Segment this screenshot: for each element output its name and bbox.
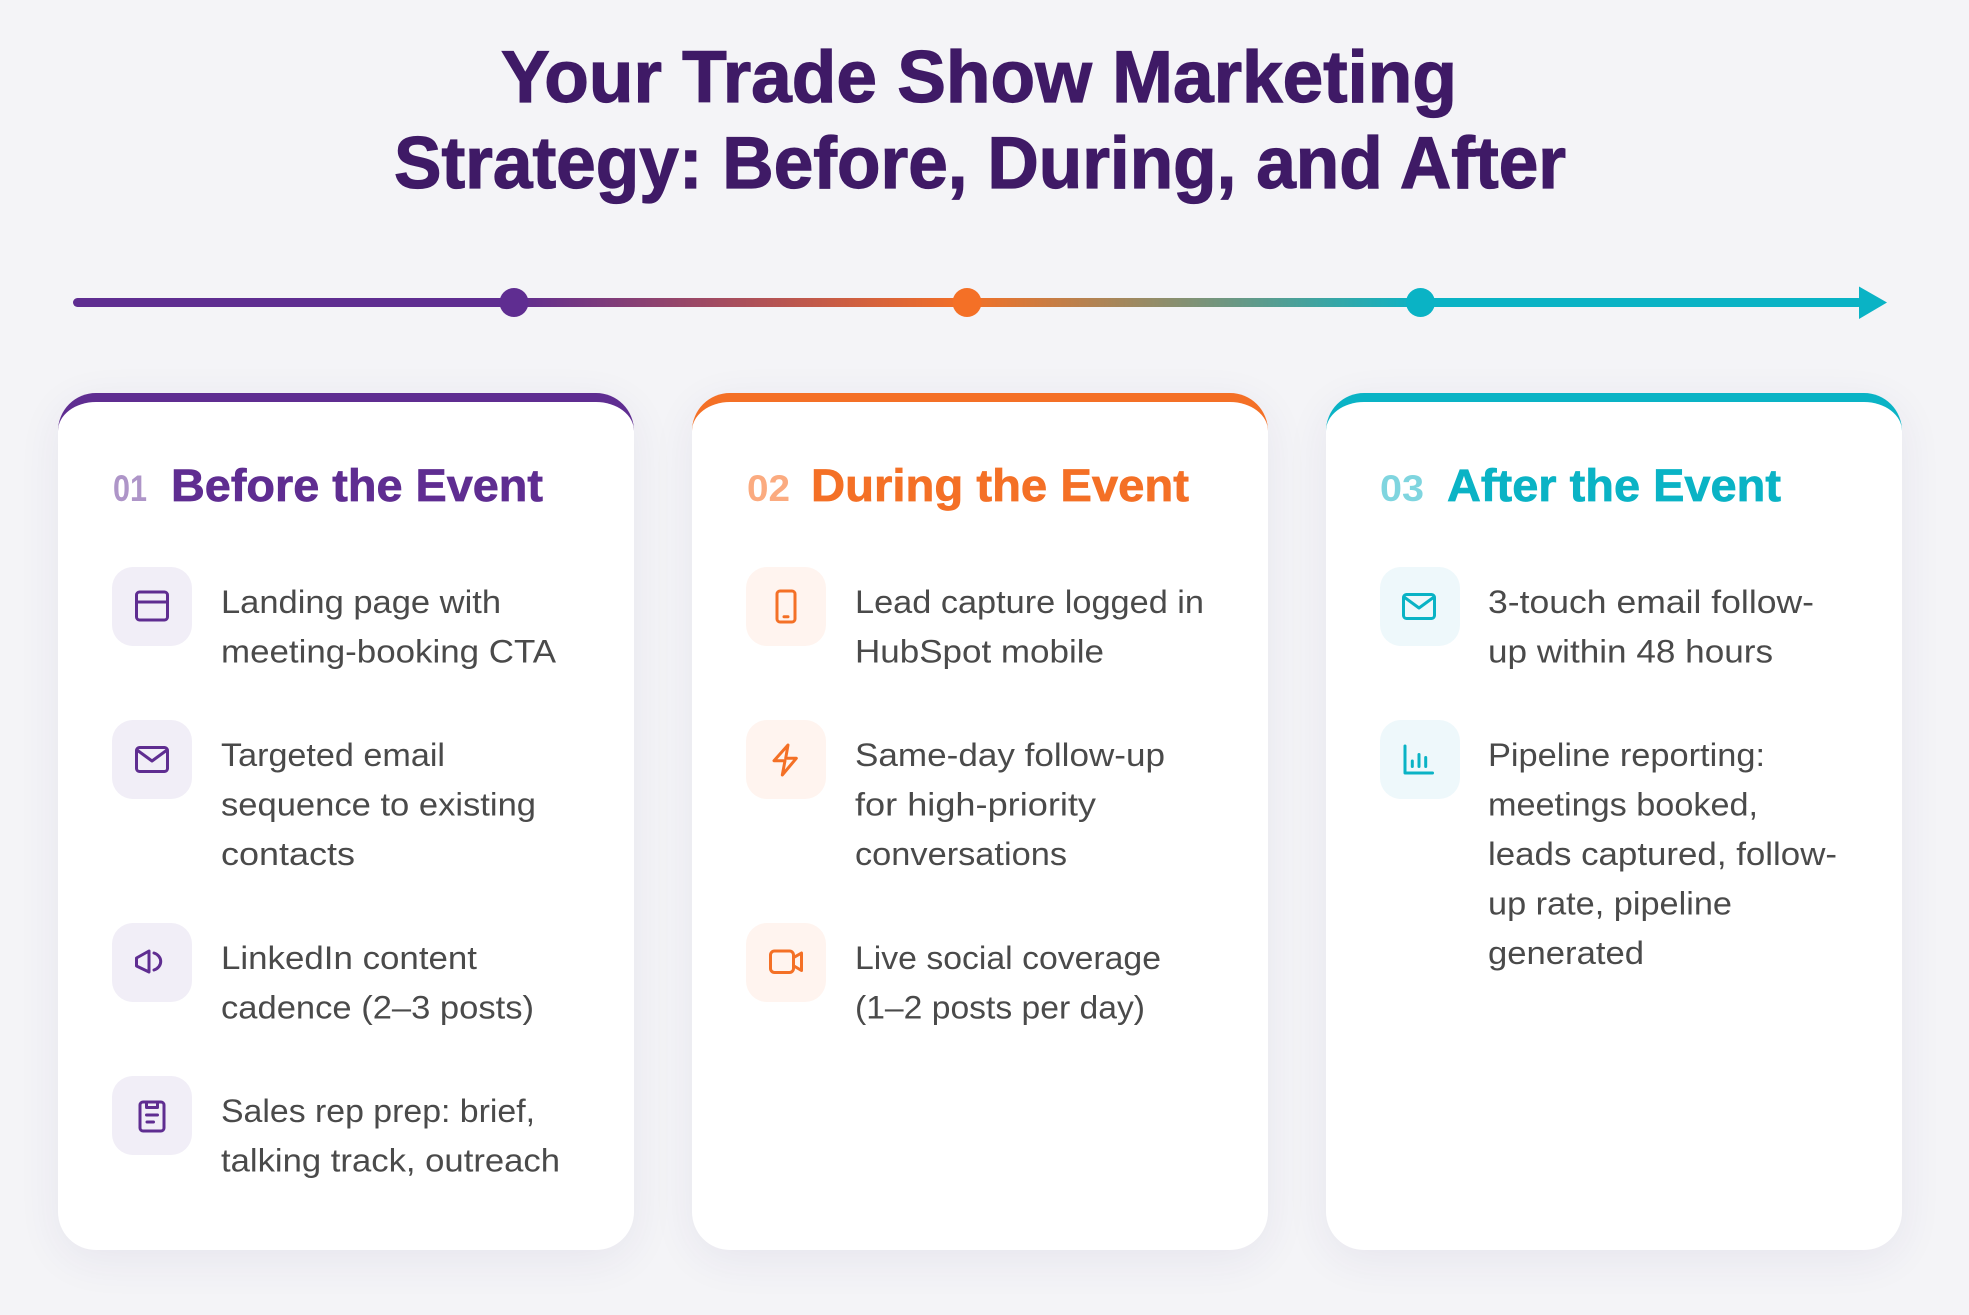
title bbox=[394, 37, 1566, 204]
item: targeted email bbox=[112, 720, 536, 872]
heading: before the event: Before the Event bbox=[171, 460, 543, 511]
panel: after the event bbox=[1326, 393, 1902, 1250]
item: email follow-up: 3-touch email follow- bbox=[1488, 584, 1814, 620]
item: targeted email: sequence to existing bbox=[221, 786, 536, 822]
item: live social coverage: (1–2 posts per day) bbox=[855, 990, 1145, 1026]
panel: before the event bbox=[58, 393, 634, 1250]
item: targeted email: Targeted email bbox=[221, 737, 445, 773]
item: pipeline reporting bbox=[1380, 720, 1837, 971]
timeline arrow bbox=[73, 286, 1887, 319]
item: live social coverage bbox=[746, 923, 1161, 1026]
item: sales rep prep: Sales rep prep: brief, bbox=[221, 1093, 535, 1129]
item: lead capture bbox=[746, 567, 1204, 670]
item: pipeline reporting: up rate, pipeline bbox=[1488, 886, 1732, 922]
item: landing page: Landing page with bbox=[221, 584, 501, 620]
item: sales rep prep: talking track, outreach bbox=[221, 1142, 560, 1178]
item: pipeline reporting: generated bbox=[1488, 935, 1644, 971]
item: linkedin content: LinkedIn content bbox=[221, 940, 477, 976]
item: sales rep prep bbox=[112, 1076, 560, 1178]
panel: during the event bbox=[692, 393, 1268, 1250]
heading: after the event: After the Event bbox=[1447, 460, 1781, 511]
item: same-day follow-up: Same-day follow-up bbox=[855, 737, 1165, 773]
item: same-day follow-up: conversations bbox=[855, 836, 1067, 872]
item: targeted email: contacts bbox=[221, 836, 355, 872]
heading: during the event: During the Event bbox=[811, 460, 1189, 511]
item: email follow-up bbox=[1380, 567, 1814, 670]
item: linkedin content bbox=[112, 923, 534, 1026]
item: lead capture: Lead capture logged in bbox=[855, 584, 1204, 620]
title: Your Trade Show Marketing bbox=[501, 37, 1457, 118]
item: live social coverage: Live social coverage bbox=[855, 940, 1161, 976]
item: pipeline reporting: Pipeline reporting: bbox=[1488, 737, 1765, 773]
item: email follow-up: up within 48 hours bbox=[1488, 634, 1773, 670]
item: landing page bbox=[112, 567, 557, 670]
title: Strategy: Before, During, and After bbox=[394, 123, 1566, 204]
item: same-day follow-up bbox=[746, 720, 1165, 872]
item: same-day follow-up: for high-priority bbox=[855, 786, 1096, 822]
item: lead capture: HubSpot mobile bbox=[855, 634, 1104, 670]
heading: after the event: 03 bbox=[1380, 468, 1424, 509]
item: pipeline reporting: meetings booked, bbox=[1488, 786, 1758, 822]
item: pipeline reporting: leads captured, follow- bbox=[1488, 836, 1837, 872]
item: linkedin content: cadence (2–3 posts) bbox=[221, 990, 534, 1026]
heading: before the event: 01 bbox=[113, 468, 147, 509]
heading: during the event: 02 bbox=[747, 468, 790, 509]
item: landing page: meeting-booking CTA bbox=[221, 634, 557, 670]
